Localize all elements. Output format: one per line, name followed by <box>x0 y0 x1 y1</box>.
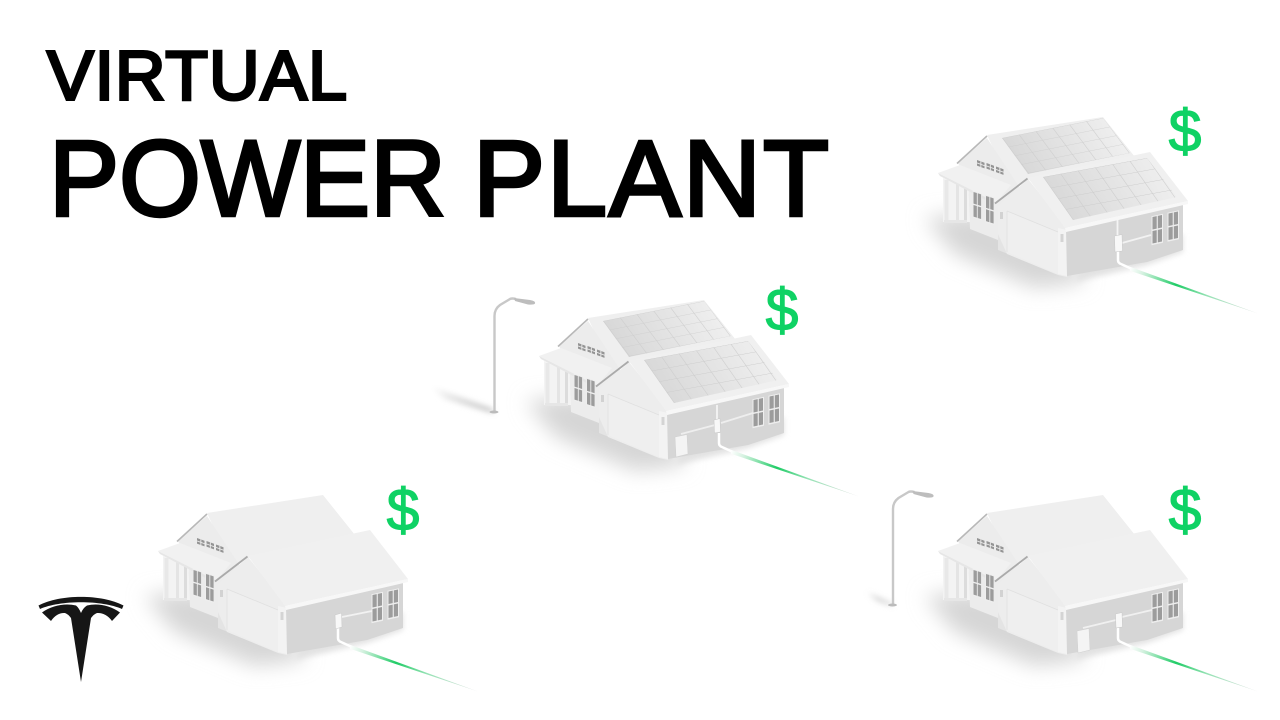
gateway box <box>1116 612 1122 628</box>
gateway box <box>714 418 720 433</box>
solar panels <box>1002 118 1177 220</box>
wires to window and battery <box>681 413 753 434</box>
conduit from roof to gateway <box>716 405 718 419</box>
dollar sign: middle: $ <box>766 277 798 343</box>
gateway box <box>1114 234 1122 252</box>
conduit from roof to gateway <box>1116 220 1118 236</box>
title: PLANT: PLANT <box>473 117 829 238</box>
wire to window <box>1122 235 1151 243</box>
dollar sign: top right: $ <box>1169 98 1201 164</box>
battery <box>675 434 688 457</box>
street lamp: middle <box>490 298 535 414</box>
wires to window and battery <box>1083 610 1152 628</box>
logo: Tesla <box>38 597 124 682</box>
gateway box <box>335 613 342 629</box>
house: top right with solar panels <box>925 117 1258 314</box>
dollar sign: bottom left: $ <box>387 477 419 543</box>
title: VIRTUAL: VIRTUAL <box>47 36 347 114</box>
house: bottom right with battery <box>925 495 1258 692</box>
street lamp: bottom right <box>888 491 934 606</box>
wire to window <box>342 611 372 617</box>
title: POWER: POWER <box>49 117 446 238</box>
street lamp shadow: middle <box>430 386 494 413</box>
dollar sign: bottom right: $ <box>1169 477 1201 543</box>
house: bottom left <box>145 495 478 692</box>
battery <box>1077 628 1090 653</box>
house: middle with solar panels and battery <box>526 300 859 496</box>
street lamp shadow: bottom right <box>868 593 893 606</box>
solar panels <box>603 301 778 403</box>
